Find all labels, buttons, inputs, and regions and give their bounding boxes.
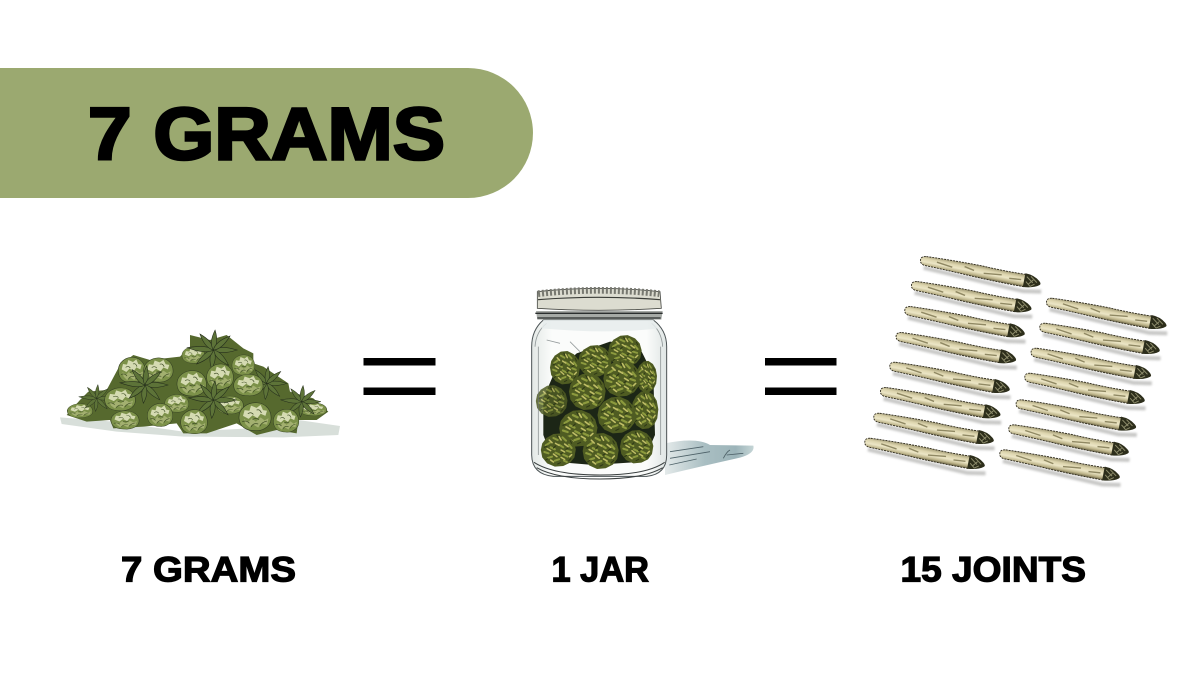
label: 1 jar: 1 JAR xyxy=(552,550,649,590)
shadow hatching xyxy=(669,447,743,465)
jar lid xyxy=(537,288,661,310)
back buds and leaves xyxy=(67,330,327,418)
equals sign 2 xyxy=(765,358,836,395)
label: 15 joints: 15 JOINTS xyxy=(900,550,1086,590)
left column of joints xyxy=(863,253,1044,476)
illustration: glass jar of buds xyxy=(532,288,754,479)
buds in jar xyxy=(536,335,658,469)
banner pill xyxy=(0,68,533,198)
jar base xyxy=(534,462,665,479)
jar body xyxy=(532,320,667,476)
equals sign 1 xyxy=(364,358,436,395)
pile silhouette xyxy=(67,335,328,435)
label: 7 grams: 7 GRAMS xyxy=(121,550,296,590)
dark interior behind buds xyxy=(543,342,655,465)
glass highlights xyxy=(535,323,663,455)
jar threads xyxy=(536,311,663,320)
title banner xyxy=(0,68,533,198)
right column of joints xyxy=(998,295,1170,488)
front buds xyxy=(111,403,299,434)
jar neck xyxy=(542,320,658,331)
pile shadow xyxy=(60,417,340,437)
jar cast shadow xyxy=(665,441,754,475)
middle buds and leaves xyxy=(105,364,263,418)
lid edge xyxy=(538,297,660,300)
lid ridges xyxy=(538,290,659,294)
illustration: pile of buds xyxy=(60,330,340,437)
illustration: 15 joints xyxy=(863,253,1170,488)
title text: 7 GRAMS xyxy=(88,92,445,176)
